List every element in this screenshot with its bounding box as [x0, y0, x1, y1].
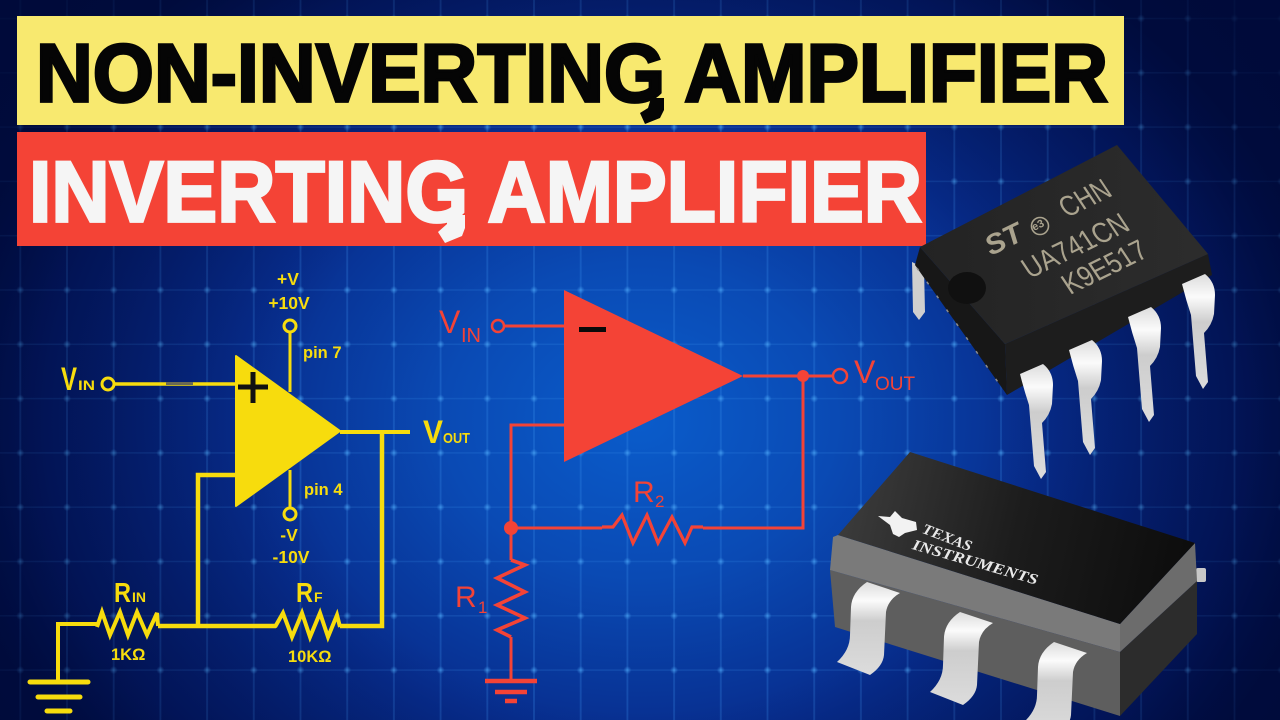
- labels red: V: [854, 354, 876, 390]
- labels red: IN: [461, 325, 481, 347]
- SMD pin 2: [930, 612, 993, 705]
- chip markings: ST: [979, 217, 1030, 262]
- TI wordmark: INSTRUMENTS: [909, 537, 1040, 589]
- labels yellow: R: [296, 577, 313, 608]
- chip markings: K9E517: [1056, 234, 1154, 301]
- labels yellow: -V: [280, 525, 298, 545]
- pin 3: [1128, 307, 1161, 422]
- labels yellow: -10V: [273, 547, 310, 567]
- resistor RIN: [97, 612, 158, 635]
- side tab: [1196, 568, 1206, 582]
- chip markings: UA741CN: [1016, 208, 1136, 285]
- TI wordmark: [909, 521, 1040, 589]
- resistor RF: [275, 613, 340, 637]
- op-amp triangle red: [564, 290, 743, 462]
- pin 1: [1020, 364, 1053, 479]
- chip markings: e3: [1030, 218, 1046, 234]
- labels yellow: [61, 269, 470, 666]
- wires yellow: [58, 332, 410, 682]
- icon: UA741 DIP chip: [912, 145, 1215, 479]
- labels yellow: V: [61, 361, 77, 397]
- chip top face: [920, 145, 1208, 344]
- labels yellow: V: [423, 414, 444, 450]
- chart: yellow non-inverting op-amp circuit: [30, 269, 470, 711]
- resistor R1: [497, 560, 525, 637]
- heading: non-inverting amplifier banner: NON-INVERTING AMPLIFIER: [36, 28, 1108, 120]
- ground yellow: [30, 682, 88, 711]
- pin 2: [1069, 340, 1102, 455]
- TI logo: [878, 511, 917, 537]
- labels yellow: +V: [277, 269, 299, 289]
- junction dots: [504, 370, 809, 535]
- SMD pin 1: [837, 582, 900, 675]
- lower body: [830, 570, 1197, 716]
- chip sides: [915, 247, 1212, 395]
- terminals red: [492, 320, 847, 383]
- labels yellow: IN: [78, 378, 95, 393]
- pin 4: [1182, 274, 1215, 389]
- labels yellow: R: [114, 577, 131, 608]
- minus sign: [579, 327, 606, 332]
- labels red: V: [439, 304, 461, 340]
- chart: red inverting op-amp circuit: [439, 290, 916, 701]
- TI wordmark: TEXAS: [920, 521, 974, 555]
- middle band: [830, 535, 1197, 652]
- chip markings: [979, 174, 1154, 301]
- labels red: R: [455, 581, 477, 614]
- rear pin: [912, 262, 925, 320]
- labels red: 1: [478, 598, 487, 617]
- plus sign: [238, 372, 268, 403]
- labels red: 2: [655, 492, 664, 511]
- labels yellow: OUT: [443, 430, 470, 447]
- chip notch: [948, 272, 986, 304]
- ground red: [485, 681, 537, 701]
- top face: [838, 452, 1195, 624]
- labels yellow: pin 4: [304, 481, 343, 499]
- heading: inverting amplifier banner: INVERTING AMPLIFIER: [29, 145, 922, 241]
- icon: Texas Instruments SMD chip: [830, 452, 1206, 720]
- resistor R2: [602, 515, 703, 543]
- input gray mark: [166, 382, 193, 385]
- wires red: [504, 326, 833, 681]
- labels yellow: 10KΩ: [288, 648, 332, 666]
- labels yellow: IN: [132, 589, 146, 605]
- labels red: OUT: [875, 374, 916, 395]
- op-amp triangle yellow: [236, 356, 340, 506]
- chip markings: CHN: [1053, 174, 1118, 224]
- labels red: R: [633, 476, 655, 509]
- terminals yellow: [102, 320, 296, 520]
- labels yellow: F: [314, 589, 323, 605]
- labels yellow: 1KΩ: [111, 646, 145, 664]
- labels red: [439, 304, 916, 617]
- SMD pin 3: [1024, 642, 1087, 720]
- labels yellow: pin 7: [303, 344, 342, 362]
- labels yellow: +10V: [268, 293, 310, 313]
